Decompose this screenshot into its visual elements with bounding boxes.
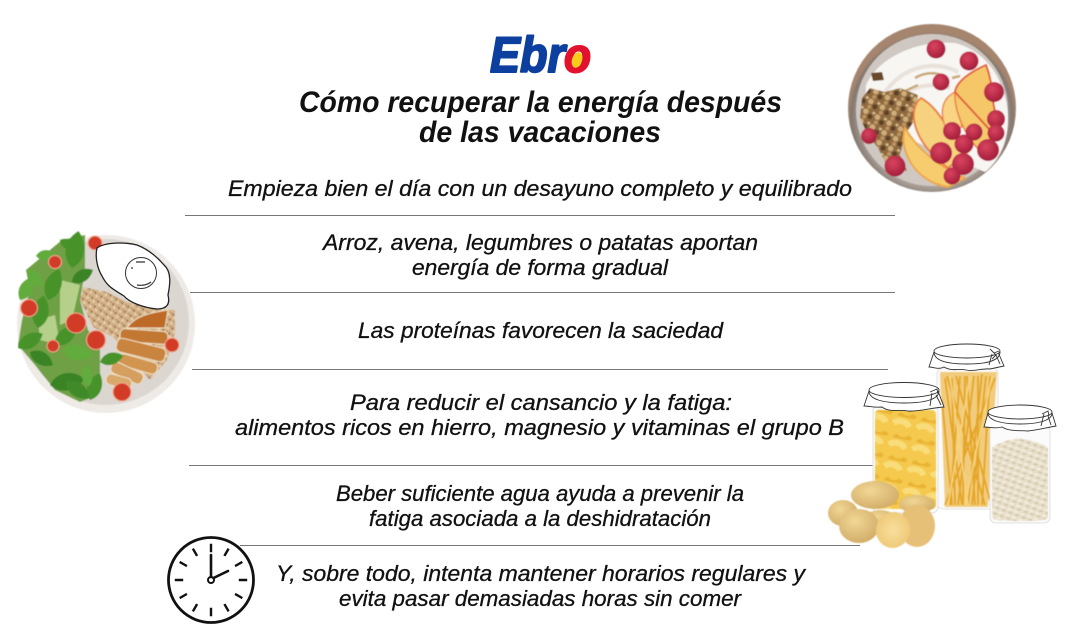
text: hydration tip bbox=[336, 481, 744, 531]
icon: clock bbox=[168, 538, 254, 622]
icon: macaroni jar bbox=[864, 382, 944, 513]
text: carbohydrates tip: energía de forma gradual bbox=[412, 255, 669, 280]
icon: yogurt bowl with fruit bbox=[848, 24, 1016, 192]
icon: salad plate with chicken and egg bbox=[14, 230, 195, 413]
peach slices bbox=[903, 128, 965, 187]
text: regular meals tip bbox=[276, 561, 807, 611]
text: fatigue tip: Para reducir el cansancio y la fatiga: bbox=[350, 390, 732, 415]
greens bbox=[18, 235, 100, 402]
text: fatigue tip: alimentos ricos en hierro, magnesio y vitaminas el grupo B bbox=[235, 415, 844, 440]
text: regular meals tip: evita pasar demasiadas horas sin comer bbox=[339, 586, 743, 611]
quinoa bbox=[80, 287, 175, 380]
logo: Ebro: o bbox=[564, 30, 591, 83]
raspberries bbox=[861, 40, 1005, 184]
text: breakfast tip: Empieza bien el día con un desayuno completo y equilibrado bbox=[228, 176, 852, 201]
chicken slices bbox=[105, 310, 168, 390]
text: carbohydrates tip bbox=[321, 230, 758, 280]
logo: Ebro: Ebr bbox=[490, 27, 567, 83]
text: carbohydrates tip: Arroz, avena, legumbres o patatas aportan bbox=[321, 230, 758, 255]
text: hydration tip: Beber suficiente agua ayuda a prevenir la bbox=[336, 481, 744, 506]
egg illustration bbox=[96, 243, 170, 309]
icon: spaghetti jar bbox=[929, 344, 1004, 509]
title bbox=[299, 86, 782, 149]
granola bbox=[860, 88, 918, 172]
icon: potatoes bbox=[828, 481, 935, 552]
title: de las vacaciones bbox=[419, 116, 661, 149]
text: hydration tip: fatiga asociada a la deshidratación bbox=[369, 506, 711, 531]
text: regular meals tip: Y, sobre todo, intenta mantener horarios regulares y bbox=[276, 561, 807, 586]
tomatoes bbox=[20, 236, 179, 401]
text: protein tip: Las proteínas favorecen la saciedad bbox=[358, 318, 724, 343]
text: fatigue tip bbox=[235, 390, 844, 440]
yogurt bbox=[865, 43, 1008, 172]
title: Cómo recuperar la energía después bbox=[299, 86, 782, 119]
icon: rice jar bbox=[984, 405, 1056, 523]
